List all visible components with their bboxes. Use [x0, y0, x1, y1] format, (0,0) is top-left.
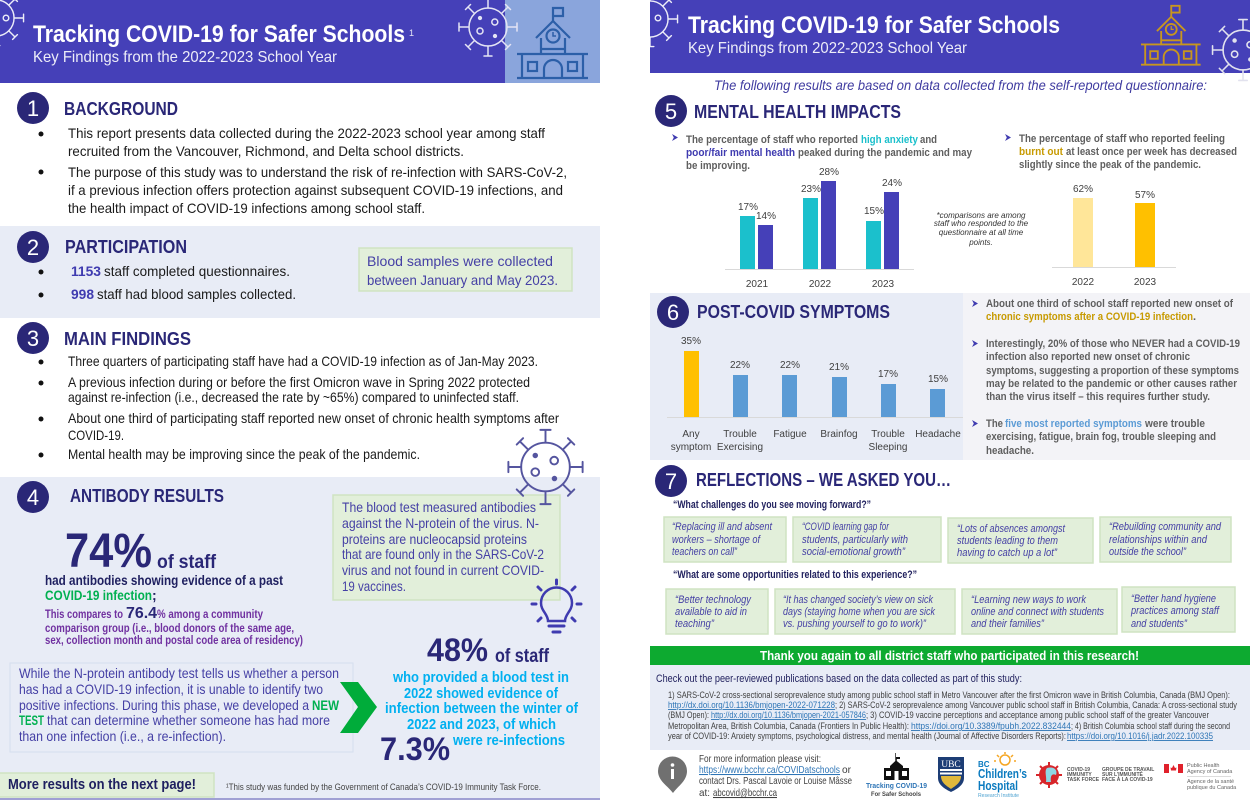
bar chart: burnout: 62% — [1073, 184, 1093, 195]
panel: new test text: positive infections. During this phase, we developed a — [19, 697, 309, 713]
bar chart: symptoms: Any — [682, 429, 700, 440]
comparison note: questionnaire at all time — [939, 228, 1024, 237]
heading: mental health: MENTAL HEALTH IMPACTS — [694, 102, 901, 122]
bar chart: symptoms: 21% — [829, 362, 849, 373]
icon: virus top left page 2 — [650, 0, 678, 48]
background bullet text: The purpose of this study was to understand the risk of re-infection with SARS-CoV-2, — [68, 164, 567, 180]
callout: blood samples: Blood samples were collected — [367, 253, 553, 269]
heading: participation: PARTICIPATION — [65, 237, 187, 257]
bar chart: anxiety and mental health: 17% — [738, 202, 758, 213]
bar chart: symptoms: symptom — [671, 442, 711, 453]
stat: 74 percent: of staff — [157, 552, 217, 573]
publications list: https://doi.org/10.3389/fpubh.2022.832444 — [911, 721, 1071, 731]
burnout text: burnt out — [1019, 146, 1063, 158]
bar chart: anxiety and mental health: 28% — [819, 167, 839, 178]
question: challenges: “What challenges do you see moving forward?” — [673, 499, 871, 511]
banner: thank you: Thank you again to all district staff who participated in this research! — [760, 648, 1139, 663]
comparison note: *comparisons are among — [937, 211, 1026, 220]
symptoms text: than the virus itself – this requires further study. — [986, 391, 1210, 403]
logo: public health agency of canada — [1164, 763, 1237, 791]
quote: technology: available to aid in — [675, 606, 747, 618]
number badge 1 — [17, 92, 49, 124]
comparison text: 76.4 — [126, 605, 157, 622]
main findings bullet text — [38, 353, 559, 462]
panel: new test text: than one infection (i.e., a re-infection). — [19, 728, 226, 744]
quote: absences — [948, 518, 1093, 563]
number badge 5 — [655, 95, 687, 127]
panel: new test text: While the N-protein antibody test tells us whether a person — [19, 665, 339, 681]
logo: immunity task force: IMMUNITY — [1067, 772, 1092, 778]
quote: hand hygiene: “Better hand hygiene — [1131, 593, 1216, 605]
quote: hand hygiene: practices among staff — [1130, 605, 1220, 617]
publications list: (BMJ Open): — [668, 710, 709, 720]
callout: blood test — [333, 495, 560, 600]
quote: learning gap: students, particularly with — [802, 534, 908, 546]
burnout text — [1005, 133, 1237, 171]
panel: page 2 header — [622, 0, 1250, 80]
number badge 5: 5 — [665, 99, 677, 124]
bar chart: anxiety and mental health: 14% — [756, 211, 776, 222]
callout: blood test: The blood test measured antibodies — [342, 499, 536, 515]
quote: new ways: online and connect with students — [971, 606, 1104, 618]
quote: absences: students leading to them — [957, 535, 1058, 547]
publications list — [668, 690, 1237, 741]
callout: more results: More results on the next page! — [8, 776, 196, 793]
title page 2: Tracking COVID-19 for Safer Schools — [688, 12, 1060, 39]
logo: public health agency of canada: publique du Canada — [1187, 785, 1237, 791]
footnote: ¹This study was funded by the Government of Canada’s COVID-19 Immunity Task Force. — [226, 782, 541, 793]
heading: main findings: MAIN FINDINGS — [64, 329, 191, 349]
bar chart: symptoms: 35% — [681, 336, 701, 347]
panel: new test text: has had a COVID-19 infection, it is unable to identify two — [19, 681, 323, 697]
callout: blood test: that are found only in the SARS-CoV-2 — [342, 546, 544, 562]
callout: blood samples — [359, 248, 572, 291]
bar chart: anxiety and mental health: 2023 — [872, 279, 895, 290]
symptoms text: were trouble — [1144, 418, 1205, 430]
icon: info pin — [658, 756, 687, 793]
stat: 48 percent: 7.3% — [380, 731, 450, 767]
main findings bullet text: A previous infection during or before the first Omicron wave in Spring 2022 protected — [68, 374, 530, 390]
callout: blood test: proteins are nucleocapsid proteins — [342, 531, 527, 547]
quote: technology: “Better technology — [675, 594, 752, 606]
heading: antibody results: ANTIBODY RESULTS — [70, 486, 224, 506]
main findings bullet text: Mental health may be improving since the peak of the pandemic. — [68, 446, 420, 462]
question: opportunities: “What are some opportunities related to this experience?” — [673, 569, 917, 581]
bar chart: symptoms: Headache — [915, 429, 961, 440]
bar chart: symptoms: Trouble — [723, 429, 757, 440]
bar chart: symptoms: 17% — [878, 369, 898, 380]
logo: immunity task force: SUR L’IMMUNITÉ — [1102, 770, 1143, 778]
quote: absences: having to catch up a lot” — [957, 547, 1058, 559]
panel: publications — [650, 665, 1250, 750]
publications list: year of COVID-19: Anxiety symptoms, psychological distress, and mental health (Journal of Affective Disorders Reports): — [668, 731, 1066, 741]
anxiety text: and — [920, 134, 937, 146]
bar chart: symptoms: 15% — [928, 374, 948, 385]
bar chart: burnout — [1052, 184, 1176, 288]
anxiety text: The percentage of staff who reported — [686, 134, 858, 146]
participation bullet text: 1153 — [71, 263, 101, 279]
contact text: at: — [699, 787, 710, 799]
contact text: abcovid@bcchr.ca — [713, 787, 777, 799]
main findings bullet text: COVID-19. — [68, 427, 124, 443]
comparison note — [934, 211, 1029, 247]
publications list: http://dx.doi.org/10.1136/bmjopen-2021-057846 — [711, 710, 866, 720]
bar chart: anxiety and mental health: 15% — [864, 206, 884, 217]
logo: immunity task force: COVID-19 — [1067, 767, 1090, 773]
quote: replacing workers — [664, 517, 786, 562]
number badge 3: 3 — [27, 326, 39, 351]
logo: public health agency of canada: Agency of Canada — [1187, 769, 1233, 775]
burnout text: slightly since the peak of the pandemic. — [1019, 159, 1201, 171]
stat: 48 percent: 2022 and 2023, of which — [407, 716, 556, 733]
bar chart: symptoms: Brainfog — [820, 429, 858, 440]
stat: 74 percent — [45, 525, 283, 603]
logo: immunity task force — [1036, 762, 1154, 788]
subtitle: Key Findings from the 2022-2023 School Year — [33, 49, 338, 66]
comparison note: staff who responded to the — [934, 219, 1029, 228]
heading: reflections: REFLECTIONS – WE ASKED YOU… — [696, 470, 951, 490]
number badge 6 — [657, 296, 689, 328]
quote: absences: “Lots of absences amongst — [957, 523, 1066, 535]
quote: replacing workers: workers – shortage of — [672, 534, 761, 546]
symptoms text: exercising, fatigue, brain fog, trouble sleeping and — [986, 431, 1216, 443]
panel: mental health impacts — [655, 95, 1237, 290]
icon: lightbulb — [532, 580, 581, 632]
quote: technology — [666, 589, 768, 634]
publications heading: Check out the peer-reviewed publications based on the data collected as part of this study: — [656, 673, 1022, 685]
bar chart: anxiety and mental health: 24% — [882, 178, 902, 189]
bar chart: burnout: 2022 — [1072, 277, 1095, 288]
stat: 74 percent: 74% — [65, 525, 152, 578]
stat: 48 percent: 48% — [427, 632, 488, 668]
comparison text: % among a community — [157, 609, 264, 621]
contact text — [699, 753, 852, 799]
bar chart: burnout: 2023 — [1134, 277, 1157, 288]
bar chart: symptoms: Exercising — [717, 442, 763, 453]
logo: BC Children's Hospital: Children’s — [978, 766, 1027, 781]
contact text: contact Drs. Pascal Lavoie or Louise Mâsse — [699, 775, 852, 787]
main findings bullet text: Three quarters of participating staff have had a COVID-19 infection as of Jan-May 2023. — [68, 353, 538, 369]
bar chart: burnout: 57% — [1135, 190, 1155, 201]
stat: 48 percent: were re-infections — [452, 732, 565, 749]
number badge 4: 4 — [27, 485, 39, 510]
symptoms text: The — [986, 418, 1003, 430]
background bullet text — [38, 125, 567, 216]
background bullet text: recruited from the Vancouver, Richmond, and Delta school districts. — [68, 143, 464, 159]
anxiety text — [672, 134, 973, 172]
logo: tracking covid-19: Tracking COVID-19 — [866, 783, 927, 790]
logo: immunity task force: GROUPE DE TRAVAIL — [1102, 767, 1154, 773]
participation bullet text — [38, 263, 296, 302]
number badge 1: 1 — [27, 96, 39, 121]
title: Tracking COVID-19 for Safer Schools — [33, 21, 405, 48]
quote: hand hygiene: and students” — [1131, 618, 1188, 630]
publications list: Metropolitan Area, British Columbia, Canada (Frontiers In Public Health): — [668, 721, 909, 731]
number badge 7: 7 — [665, 469, 677, 494]
panel: reflections — [655, 465, 1235, 634]
bar chart: symptoms: Trouble — [871, 429, 905, 440]
heading: background: BACKGROUND — [64, 99, 178, 119]
panel: new test text — [10, 663, 353, 752]
number badge 4 — [17, 481, 49, 513]
contact text: or — [842, 764, 851, 776]
stat: 74 percent: had antibodies showing evidence of a past — [45, 572, 283, 588]
quote: rebuilding community: “Rebuilding community and — [1109, 521, 1222, 533]
callout: blood test: virus and not found in current COVID- — [342, 562, 544, 578]
stat: 48 percent: 2022 showed evidence of — [404, 685, 559, 702]
callout: blood samples: between January and May 2023. — [367, 272, 558, 288]
heading: post-covid: POST-COVID SYMPTOMS — [697, 302, 890, 322]
icon: school gold — [1141, 6, 1201, 65]
panel: antibody results — [0, 430, 600, 800]
background bullet text: This report presents data collected during the 2022-2023 school year among staff — [68, 125, 545, 141]
symptoms text — [972, 298, 1240, 457]
logo: tracking covid-19 — [866, 753, 927, 798]
symptoms text: . — [1193, 311, 1196, 323]
title footnote marker: 1 — [409, 28, 414, 38]
quote: new ways — [962, 589, 1117, 634]
number badge 2 — [17, 231, 49, 263]
logo: immunity task force: TASK FORCE — [1067, 777, 1100, 783]
quote: learning gap — [793, 517, 941, 562]
bar chart: anxiety and mental health: 23% — [801, 184, 821, 195]
contact text: https://www.bcchr.ca/COVIDatschools — [699, 764, 840, 776]
bar chart: symptoms — [667, 336, 963, 453]
panel: new test text: that can determine whether someone has had more — [47, 712, 330, 728]
panel: background — [17, 92, 567, 216]
panel: new test text: NEW — [312, 697, 340, 713]
quote: sick days: days (staying home when you are sick — [783, 606, 935, 618]
bar chart: anxiety and mental health: 2022 — [809, 279, 832, 290]
stat: 48 percent: of staff — [495, 646, 550, 667]
stat: 74 percent: ; — [152, 587, 157, 603]
burnout text: The percentage of staff who reported feeling — [1019, 133, 1225, 145]
number badge 3 — [17, 322, 49, 354]
quote: technology: teaching” — [675, 618, 715, 630]
participation bullet text: staff had blood samples collected. — [97, 286, 296, 302]
icon: virus top left — [0, 0, 24, 46]
symptoms text: chronic symptoms after a COVID-19 infection — [986, 311, 1193, 323]
quote: rebuilding community — [1100, 517, 1231, 562]
comparison text: This compares to — [45, 609, 123, 621]
number badge 7 — [655, 465, 687, 497]
quote: replacing workers: teachers on call” — [672, 546, 738, 558]
subtitle page 2: Key Findings from 2022-2023 School Year — [688, 40, 968, 57]
logo: UBC — [938, 757, 964, 792]
symptoms text: headache. — [986, 445, 1034, 457]
anxiety text: poor/fair mental health — [686, 147, 795, 159]
panel: main findings — [17, 322, 559, 462]
background bullet text: the health impact of COVID-19 infections among school staff. — [68, 200, 425, 216]
stat: 48 percent — [380, 632, 579, 767]
panel: post-covid symptoms — [650, 293, 1250, 460]
bar chart: symptoms: Sleeping — [869, 442, 907, 453]
quote: rebuilding community: relationships within and — [1109, 534, 1208, 546]
publications list: https://doi.org/10.1016/j.jadr.2022.100335 — [1067, 731, 1213, 741]
main findings bullet text: About one third of participating staff reported new onset of chronic health symptoms after — [68, 410, 559, 426]
bar chart: symptoms: 22% — [780, 360, 800, 371]
arrow: green chevron — [340, 682, 377, 733]
logo: BC Children's Hospital — [978, 752, 1027, 799]
number badge 6: 6 — [667, 300, 679, 325]
quote: new ways: and their families” — [971, 618, 1045, 630]
logo: public health agency of canada: Public Health — [1187, 763, 1219, 769]
quote: learning gap: “COVID learning gap for — [802, 521, 890, 533]
quote: rebuilding community: outside the school” — [1109, 546, 1187, 558]
intro sentence: The following results are based on data collected from the self-reported questionnaire: — [714, 77, 1207, 93]
symptoms text: infection also reported new onset of chronic — [986, 351, 1190, 363]
quote: new ways: “Learning new ways to work — [971, 594, 1086, 606]
callout: blood test: 19 vaccines. — [342, 578, 406, 594]
icon: virus mid — [508, 430, 583, 504]
stat: 74 percent: COVID-19 infection — [45, 587, 152, 603]
bar chart: anxiety and mental health — [725, 167, 914, 290]
stat: 48 percent: infection between the winter of — [385, 700, 579, 717]
logo: tracking covid-19: For Safer Schools — [871, 791, 921, 798]
bar chart: symptoms: 22% — [730, 360, 750, 371]
panel: new test text: TEST — [19, 712, 44, 728]
callout: blood test: against the N-protein of the virus. N- — [342, 515, 539, 531]
quote: sick days: vs. pushing yourself to go to work)” — [783, 618, 927, 630]
quote: replacing workers: “Replacing ill and absent — [672, 521, 773, 533]
banner: thank you — [650, 646, 1250, 665]
comparison text: sex, collection month and postal code area of residency) — [45, 635, 303, 647]
logo: BC Children's Hospital: Research Institute — [978, 793, 1019, 799]
contact text: For more information please visit: — [699, 753, 821, 765]
quote: sick days — [775, 589, 955, 634]
comparison text: comparison group (i.e., blood donors of the same age, — [45, 623, 294, 635]
anxiety text: high anxiety — [861, 134, 919, 146]
logo: BC Children's Hospital: Hospital — [978, 778, 1018, 793]
participation bullet text: staff completed questionnaires. — [104, 263, 290, 279]
callout: more results — [0, 773, 214, 797]
bar chart: anxiety and mental health: 2021 — [746, 279, 769, 290]
comparison note: points. — [968, 238, 993, 247]
icon: virus right page 2 — [1213, 20, 1250, 80]
logo: immunity task force: FACE À LA COVID-19 — [1102, 776, 1153, 783]
comparison text — [45, 605, 303, 647]
stat: 48 percent: who provided a blood test in — [392, 669, 569, 686]
logo: UBC: UBC — [941, 760, 961, 770]
anxiety text: peaked during the pandemic and may — [798, 147, 973, 159]
icon: virus header right — [459, 0, 517, 56]
number badge 2: 2 — [27, 235, 39, 260]
main findings bullet text: against re-infection (i.e., decreased the rate by ~65%) compared to uninfected staff. — [68, 389, 519, 405]
quote: hand hygiene — [1122, 587, 1235, 632]
logo: public health agency of canada: Agence de la santé — [1187, 779, 1234, 785]
quote: learning gap: social-emotional growth” — [802, 546, 906, 558]
bar chart: symptoms: Fatigue — [773, 429, 807, 440]
panel: participation — [0, 226, 600, 318]
icon: school — [517, 8, 588, 78]
publications list: http://dx.doi.org/10.1136/bmjopen-2022-071228 — [668, 700, 835, 710]
background bullet text: if a previous infection offers protection against subsequent COVID-19 infections, and — [68, 182, 563, 198]
panel: page 1 header — [0, 0, 600, 83]
quote: sick days: “It has changed society’s view on sick — [783, 594, 933, 606]
participation bullet text: 998 — [71, 286, 94, 302]
logo: BC Children's Hospital: BC — [978, 760, 990, 769]
symptoms text: five most reported symptoms — [1005, 418, 1142, 430]
anxiety text: be improving. — [686, 160, 750, 172]
